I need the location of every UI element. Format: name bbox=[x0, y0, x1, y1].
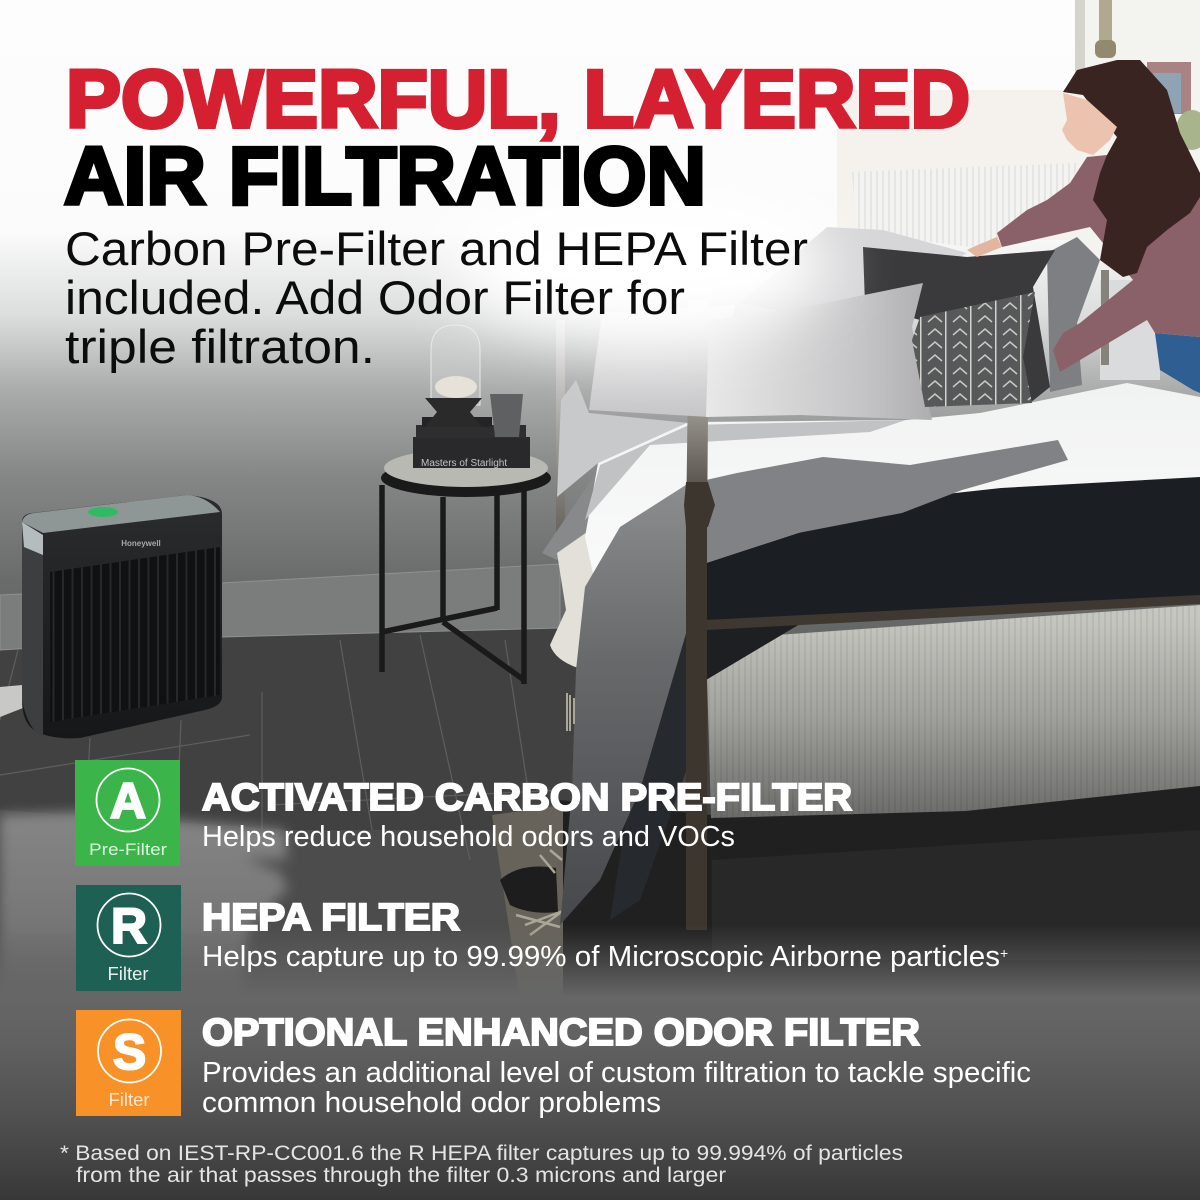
subtitle: Carbon Pre-Filter and HEPA Filter bbox=[65, 222, 808, 275]
under-bed shadow bbox=[560, 784, 1200, 1000]
white striped pillow bbox=[852, 163, 1077, 247]
fringe tassels of throw bbox=[567, 693, 574, 731]
badge: activated carbon pre-filter bbox=[75, 760, 180, 866]
filter A text: Helps reduce household odors and VOCs bbox=[202, 821, 735, 853]
chevron pillow bbox=[912, 292, 1035, 407]
sunlit floor patch bbox=[0, 812, 288, 1000]
subtitle: included. Add Odor Filter for bbox=[65, 271, 685, 324]
table rim bbox=[381, 459, 551, 497]
badge: HEPA filter: Filter bbox=[108, 964, 149, 984]
bottom gray overlay bbox=[0, 925, 1200, 1200]
filter S text bbox=[202, 1012, 1031, 1119]
badge: activated carbon pre-filter: A bbox=[110, 773, 146, 829]
bed post knob bbox=[684, 482, 715, 527]
gray throw top bbox=[706, 440, 1068, 563]
books bbox=[413, 417, 530, 469]
green indicator bbox=[88, 507, 118, 517]
gray sheet pillow bbox=[1047, 237, 1100, 392]
subtitle bbox=[65, 222, 808, 373]
purifier left glass bbox=[22, 522, 43, 555]
gray throw blanket bbox=[560, 480, 706, 925]
headboard bbox=[837, 90, 1082, 240]
footnote bbox=[60, 1142, 903, 1187]
navy under rail wedge bbox=[706, 624, 800, 680]
table legs bbox=[382, 485, 524, 684]
filter R text: HEPA FILTER bbox=[202, 897, 460, 939]
rear bed post with finial bbox=[1095, 0, 1116, 365]
dark pillow bbox=[863, 247, 1055, 403]
badge: odor filter: S bbox=[113, 1024, 146, 1080]
filter S text: common household odor problems bbox=[202, 1087, 661, 1119]
badge: HEPA filter: R bbox=[111, 898, 147, 954]
brand name: Honeywell bbox=[121, 539, 161, 548]
air purifier bbox=[22, 495, 222, 738]
floor planks bbox=[0, 635, 560, 900]
far left bed post bbox=[556, 320, 565, 550]
floor lower area bbox=[0, 800, 560, 1000]
filter R text: Helps capture up to 99.99% of Microscopic Airborne particles bbox=[202, 941, 1000, 973]
hand bbox=[967, 237, 1002, 257]
filter R text: + bbox=[1000, 945, 1008, 961]
pale pillow bbox=[740, 227, 967, 315]
gray sheet under duvet bbox=[542, 443, 650, 560]
back left pillow bbox=[589, 305, 735, 417]
title line: powerful, layered: POWERFUL, LAYERED bbox=[66, 54, 970, 145]
hair bbox=[1063, 60, 1200, 277]
filter A text bbox=[202, 777, 852, 853]
glass dome with crystal bbox=[425, 325, 482, 427]
footnote: from the air that passes through the filter 0.3 microns and larger bbox=[76, 1164, 726, 1187]
marble top bbox=[384, 449, 548, 487]
side table bbox=[381, 325, 551, 684]
badge: HEPA filter bbox=[76, 885, 181, 991]
purifier grille bbox=[50, 547, 220, 722]
badge: odor filter: Filter bbox=[108, 1090, 150, 1110]
title bbox=[64, 54, 970, 222]
woman bbox=[967, 60, 1200, 393]
white wash at top-left of bed bbox=[450, 190, 830, 340]
dark hanging blanket bbox=[610, 560, 706, 920]
purifier body bbox=[22, 495, 222, 738]
navy blanket bbox=[706, 477, 1200, 622]
right wall beside the woman bbox=[1100, 280, 1160, 380]
sweater bbox=[997, 155, 1200, 372]
rug with tassels bbox=[492, 805, 1200, 1000]
foreground bed post bbox=[686, 300, 709, 930]
white duvet bbox=[585, 383, 1200, 605]
wall bbox=[0, 0, 1200, 700]
books: Masters of Starlight bbox=[421, 458, 507, 469]
subtitle: triple filtraton. bbox=[65, 320, 375, 373]
badge: odor filter bbox=[76, 1010, 181, 1116]
window area and picture bbox=[1075, 0, 1200, 260]
sunlight near baseboard bbox=[0, 685, 23, 717]
badge: activated carbon pre-filter: Pre-Filter bbox=[89, 840, 167, 859]
title line: air filtration: AIR FILTRATION bbox=[64, 131, 706, 222]
purifier glass top bbox=[22, 495, 220, 533]
filter A text: ACTIVATED CARBON PRE-FILTER bbox=[202, 777, 852, 819]
face bbox=[1062, 93, 1117, 155]
filter R text bbox=[202, 897, 1008, 973]
filter S text: Provides an additional level of custom filtration to tackle specific bbox=[202, 1057, 1031, 1089]
dark glass cup bbox=[490, 394, 523, 437]
jeans bbox=[1155, 333, 1200, 393]
big front pillow bbox=[706, 283, 932, 420]
footnote: * Based on IEST-RP-CC001.6 the R HEPA filter captures up to 99.994% of particles bbox=[60, 1142, 903, 1165]
white sheet hanging bbox=[550, 530, 600, 668]
bed mattress bbox=[706, 605, 1200, 818]
mattress sheet bbox=[557, 380, 689, 497]
floor bbox=[0, 628, 760, 1028]
filter S text: OPTIONAL ENHANCED ODOR FILTER bbox=[202, 1012, 920, 1054]
baseboard bbox=[0, 564, 560, 650]
purifier side panel bbox=[22, 522, 43, 737]
bed rail bbox=[706, 595, 1200, 630]
